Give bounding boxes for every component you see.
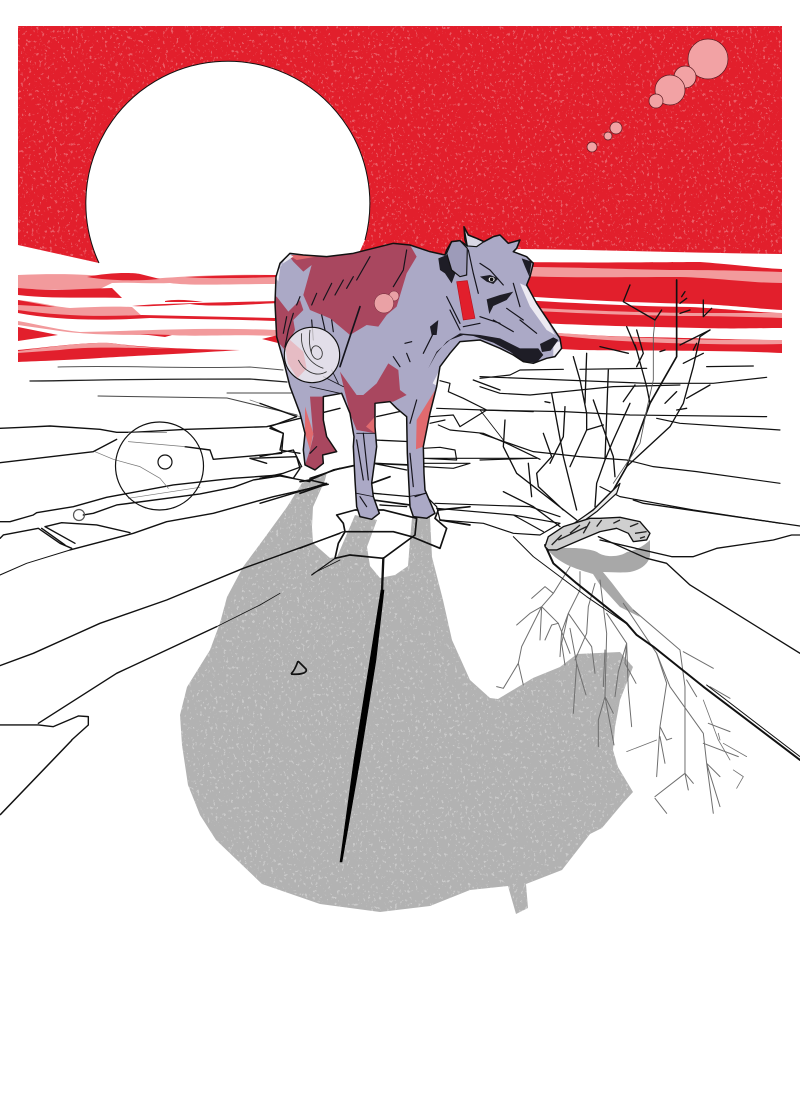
- cow white highlights: [275, 253, 563, 387]
- distant horizontal cracks, left: [30, 366, 297, 415]
- cow outline: [275, 227, 562, 519]
- ear tag: [457, 281, 475, 320]
- shadow of the dead tree and its root: [497, 540, 747, 813]
- cracks beside the front leg: [423, 380, 560, 535]
- cow: [274, 226, 562, 520]
- cow red patches: [273, 243, 417, 472]
- pink bubbles in the sky: [587, 39, 728, 152]
- small D-shaped mark: [291, 661, 306, 674]
- panel: red sky: [18, 26, 782, 266]
- cracks at the foot of the tree: [513, 500, 800, 760]
- cow dark ink shading: [428, 255, 558, 368]
- translucent spiral bubble on the cow: [284, 327, 340, 383]
- outlined bubbles on the ground: [74, 422, 204, 520]
- left horizon stripes: [18, 273, 278, 362]
- cow salmon highlights: [288, 255, 438, 450]
- ground shadow of the cow: [170, 470, 650, 920]
- cow ink hatching: [283, 250, 537, 507]
- cracks under the hooves: [300, 463, 470, 600]
- lower-left crack continuation: [0, 740, 72, 815]
- tree shadow branches: [497, 567, 747, 813]
- sun outline: [86, 61, 370, 263]
- tree trunk and root: [545, 483, 650, 550]
- cracks between the legs: [260, 403, 410, 507]
- bold central crack: [340, 590, 384, 862]
- dead tree branches: [503, 280, 712, 545]
- right horizon stripes: [520, 262, 782, 353]
- near ear: [447, 241, 467, 277]
- cracks in the dry ground, left side: [0, 400, 340, 740]
- cracks in the dry ground, upper right: [480, 366, 780, 523]
- horn: [464, 227, 484, 247]
- pink bubbles on the cow: [374, 291, 399, 313]
- cow body: [276, 236, 561, 518]
